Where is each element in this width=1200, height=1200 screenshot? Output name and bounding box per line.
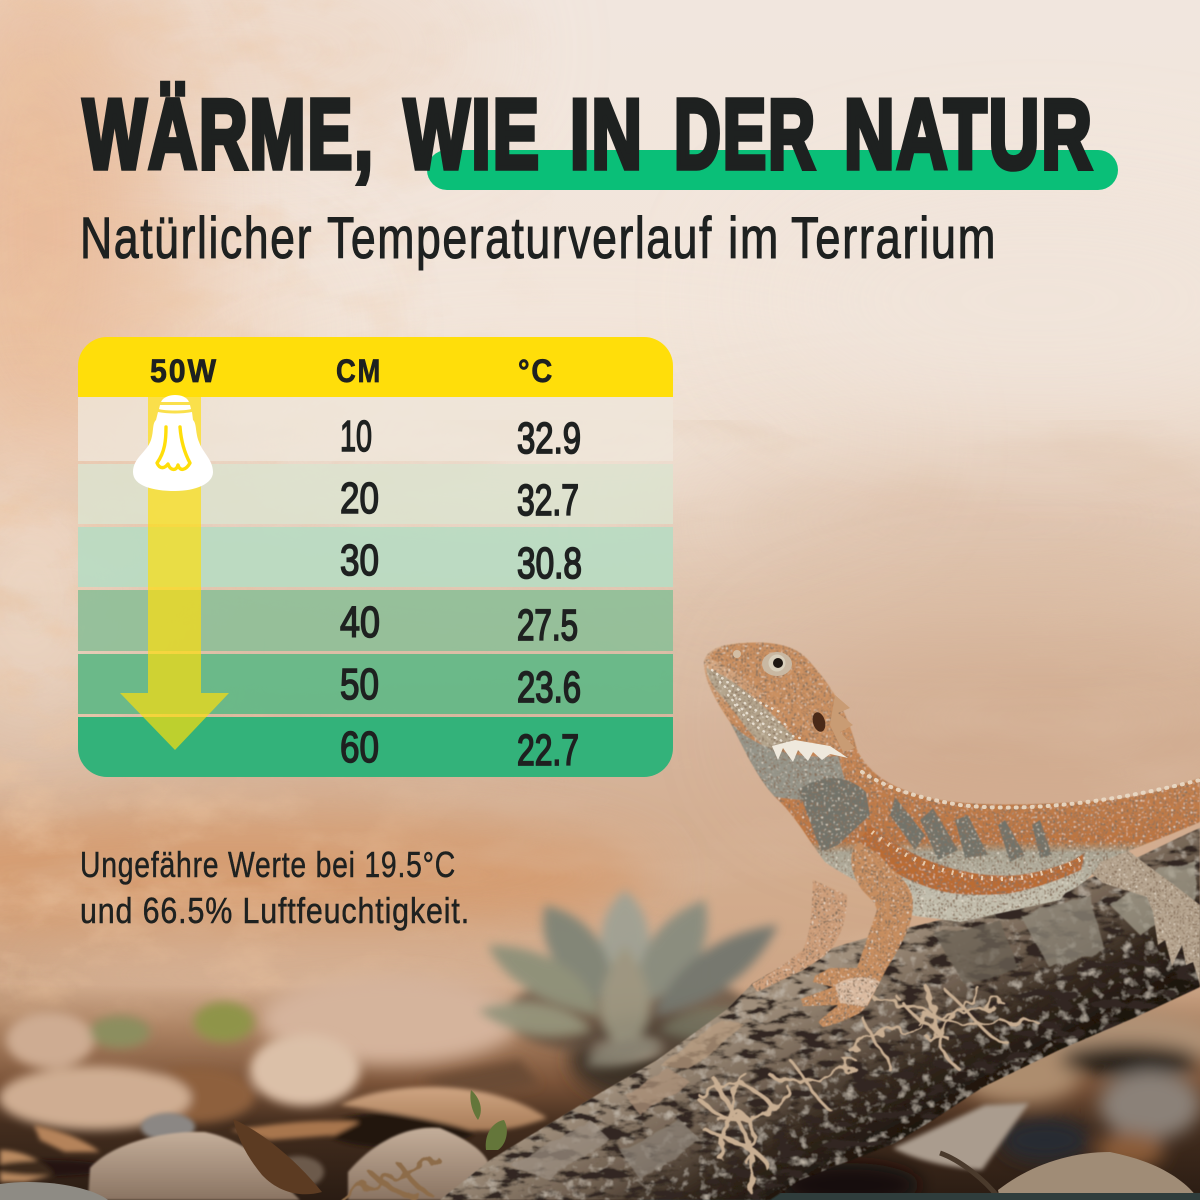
back highlight scales: [862, 772, 1200, 808]
rear leg: [1083, 843, 1200, 985]
large dry leaf: [998, 1152, 1197, 1200]
temperature column: 23.6: [517, 663, 581, 712]
title: [83, 79, 1118, 190]
title: IN: [570, 79, 644, 189]
footnote: [80, 844, 470, 931]
table header labels: CM: [336, 353, 382, 389]
far blurred ground: [260, 975, 1200, 1200]
dry curled leaf: [233, 1119, 322, 1194]
jaw spikes: [772, 740, 848, 762]
dark bottom strip: [640, 1193, 1200, 1200]
eye: [762, 652, 792, 676]
bearded dragon lizard: [704, 643, 1200, 1027]
distance column: 30: [340, 536, 379, 585]
temperature column: 22.7: [517, 726, 579, 775]
distance column: 50: [340, 660, 379, 709]
subtitle: Natürlicher: [80, 206, 313, 271]
heat arrow: [120, 397, 229, 750]
body and head silhouette: [704, 643, 1200, 918]
title: DER: [674, 79, 817, 189]
mid ground leaves and stones: [0, 1087, 547, 1188]
subtitle: Terrarium: [791, 206, 997, 271]
footnote: und 66.5% Luftfeuchtigkeit.: [80, 890, 470, 931]
orange spine band: [860, 825, 1085, 895]
temperature column: 27.5: [517, 601, 578, 650]
beard scale rows: [712, 670, 805, 748]
title highlight bar: [427, 150, 1118, 190]
distance column: 10: [340, 412, 372, 461]
ear opening: [811, 711, 827, 733]
table header labels: 50W: [150, 353, 218, 389]
subtitle: [80, 206, 997, 271]
distance column: 20: [340, 474, 379, 523]
subtitle: im: [728, 206, 780, 271]
head colour layers: [708, 643, 855, 748]
side spines: [872, 832, 1082, 879]
icon: light bulb: [133, 395, 213, 491]
belly: [905, 868, 1085, 922]
bark flakes: [510, 860, 1195, 1180]
temperature column: 32.9: [517, 414, 581, 463]
subtitle: Temperaturverlauf: [327, 206, 713, 271]
moss tufts on the log: [340, 985, 1040, 1198]
distance column: [340, 412, 380, 772]
blurred succulent plant: [478, 890, 778, 1067]
table header labels: [150, 353, 554, 389]
far front leg: [752, 880, 847, 992]
ground: rocks and dry leaves: [0, 975, 1200, 1200]
small green shoots: [470, 1090, 507, 1150]
temperature table: [78, 337, 673, 777]
distance column: 40: [340, 598, 380, 647]
near stones: [88, 1132, 300, 1200]
grey leaf on the right: [893, 1103, 1029, 1170]
log branch: [340, 828, 1200, 1200]
footnote: Ungefähre Werte bei 19.5°C: [80, 844, 456, 885]
distance column: 60: [340, 723, 379, 772]
temperature column: [517, 414, 582, 775]
table header labels: °C: [518, 353, 554, 389]
title: WÄRME,: [83, 79, 375, 189]
temperature column: 30.8: [517, 539, 582, 588]
title: WIE: [404, 79, 541, 189]
near front leg: [801, 843, 913, 1027]
back colour stripes: [890, 797, 1052, 862]
temperature column: 32.7: [517, 476, 579, 525]
title: NATUR: [844, 79, 1094, 189]
